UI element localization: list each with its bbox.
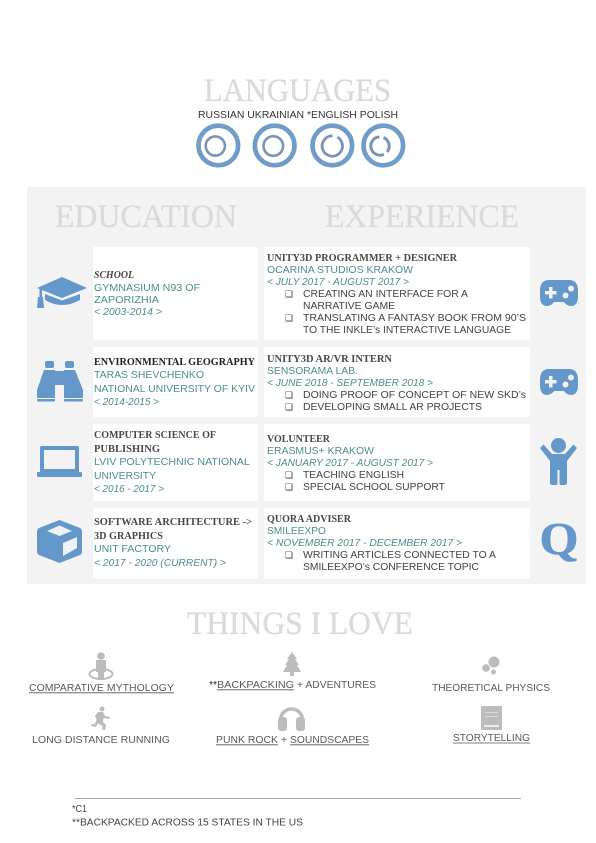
education card: software architecture: 3D GRAPHICS [94, 531, 163, 542]
icon: pine tree [283, 652, 301, 676]
icon: game controller [540, 369, 578, 395]
education card: environmental geography [93, 347, 258, 417]
experience card: unity3d ar/vr intern [264, 347, 530, 417]
interest: punk rock and soundscapes: + [281, 735, 287, 746]
footnotes [72, 798, 521, 828]
experience card: unity3d ar/vr intern: ❏ [285, 391, 293, 401]
experience card: unity3d ar/vr intern: UNITY3D AR/VR INTERN [267, 354, 392, 365]
interest: backpacking and adventures: + ADVENTURES [297, 680, 376, 691]
experience card: unity3d ar/vr intern: SENSORAMA LAB. [267, 366, 358, 377]
experience card: volunteer: VOLUNTEER [267, 434, 330, 445]
experience card: unity3d programmer: < JULY 2017 - AUGUST 2017 > [267, 277, 409, 288]
interest: long distance running: LONG DISTANCE RUNNING [32, 735, 170, 746]
experience card: unity3d programmer [264, 247, 530, 340]
experience card: volunteer: ERASMUS+ KRAKOW [267, 446, 375, 457]
icon: laptop [37, 446, 82, 477]
icon: headphones [278, 709, 305, 731]
icon: cube [37, 520, 82, 563]
heading: experience: EXPERIENCE [325, 199, 519, 235]
experience card: unity3d programmer: TO THE INKLE’s INTERACTIVE LANGUAGE [303, 325, 511, 336]
experience card: volunteer [264, 424, 530, 501]
education card: software architecture: < 2017 - 2020 (CURRENT) > [94, 558, 226, 569]
interest: backpacking and adventures [209, 680, 376, 691]
education card: school: ZAPORIZHIA [94, 295, 159, 306]
experience card: volunteer: SPECIAL SCHOOL SUPPORT [303, 482, 445, 493]
footnotes: **BACKPACKED ACROSS 15 STATES IN THE US [72, 818, 303, 828]
heading: languages: LANGUAGES [204, 73, 391, 109]
ring: english [312, 126, 352, 165]
interest: backpacking and adventures: ** [209, 680, 217, 691]
experience card: volunteer: TEACHING ENGLISH [303, 470, 404, 481]
experience card: unity3d programmer: ❏ [285, 290, 293, 300]
icon: book [481, 706, 502, 730]
education card: software architecture: UNIT FACTORY [94, 544, 171, 555]
experience card: quora adviser: WRITING ARTICLES CONNECTED TO A [303, 550, 496, 561]
interest: backpacking and adventures: BACKPACKING [217, 680, 294, 691]
icon: quora q: Q [540, 514, 578, 564]
education card: school [93, 247, 258, 340]
education card: environmental geography: < 2014-2015 > [94, 397, 159, 408]
icon: person on ring [90, 652, 112, 680]
education card: environmental geography: NATIONAL UNIVERSITY OF KYIV [94, 384, 255, 395]
education card: school: SCHOOL [94, 270, 134, 281]
education card: software architecture: SOFTWARE ARCHITECTURE -> [94, 517, 252, 528]
education card: computer science of publishing: COMPUTER SCIENCE OF [94, 430, 216, 441]
experience card: quora adviser: SMILEEXPO [267, 526, 326, 537]
experience card: quora adviser [264, 508, 530, 578]
education card: computer science of publishing: < 2016 - 2017 > [94, 484, 164, 495]
experience card: unity3d ar/vr intern: DEVELOPING SMALL AR PROJECTS [303, 402, 482, 413]
interest: storytelling: STORYTELLING [453, 733, 530, 744]
icon: bubbles [482, 656, 500, 674]
experience card: volunteer: < JANUARY 2017 - AUGUST 2017 > [267, 458, 433, 469]
ring: russian [198, 126, 238, 165]
education card: school: GYMNASIUM N93 OF [94, 283, 200, 294]
experience card: unity3d ar/vr intern: ❏ [285, 403, 293, 413]
experience card: unity3d programmer: UNITY3D PROGRAMMER + DESIGNER [267, 253, 457, 264]
experience card: volunteer: ❏ [285, 483, 293, 493]
education card: school: < 2003-2014 > [94, 307, 162, 318]
experience card: unity3d programmer: TRANSLATING A FANTASY BOOK FROM 90’S [303, 313, 526, 324]
education card: computer science of publishing: PUBLISHING [94, 444, 160, 455]
interest: punk rock and soundscapes [216, 735, 369, 746]
icon: graduation cap [37, 277, 87, 308]
education card: computer science of publishing: LVIV POLYTECHNIC NATIONAL [94, 457, 250, 468]
education card: environmental geography: TARAS SHEVCHENKO [94, 370, 204, 381]
experience card: unity3d programmer: NARRATIVE GAME [303, 301, 395, 312]
interest: punk rock and soundscapes: SOUNDSCAPES [290, 735, 369, 746]
experience card: unity3d ar/vr intern: DOING PROOF OF CONCEPT OF NEW SKD’s [303, 390, 526, 401]
icon: runner [91, 706, 110, 730]
footnotes: *C1 [72, 804, 87, 815]
experience card: unity3d programmer: CREATING AN INTERFACE FOR A [303, 289, 468, 300]
heading: education: EDUCATION [55, 199, 237, 235]
experience card: quora adviser: SMILEEXPO’s CONFERENCE TOPIC [303, 562, 479, 573]
icon: person with raised arms [540, 438, 577, 485]
interest: theoretical physics: THEORETICAL PHYSICS [432, 683, 550, 694]
ring: polish [364, 126, 403, 165]
panel: education and experience [27, 187, 586, 584]
interest: comparative mythology: COMPARATIVE MYTHOLOGY [29, 683, 174, 694]
experience card: volunteer: ❏ [285, 471, 293, 481]
language names: RUSSIAN UKRAINIAN *ENGLISH POLISH [198, 110, 398, 121]
education card: environmental geography: ENVIRONMENTAL GEOGRAPHY [94, 357, 255, 368]
ring: ukrainian [255, 126, 294, 165]
experience card: quora adviser: QUORA ADVISER [267, 514, 351, 525]
education card: computer science of publishing [93, 424, 258, 501]
education card: computer science of publishing: UNIVERSITY [94, 471, 156, 482]
icon: game controller [540, 280, 578, 306]
experience card: unity3d programmer: ❏ [285, 314, 293, 324]
language proficiency rings [198, 126, 403, 165]
experience card: unity3d ar/vr intern: < JUNE 2018 - SEPTEMBER 2018 > [267, 378, 433, 389]
experience card: unity3d programmer: OCARINA STUDIOS KRAKOW [267, 265, 414, 276]
interest: punk rock and soundscapes: PUNK ROCK [216, 735, 278, 746]
experience card: quora adviser: ❏ [285, 551, 293, 561]
icon: binoculars [37, 361, 83, 402]
education card: software architecture [93, 508, 258, 578]
heading: things i love: THINGS I LOVE [187, 606, 413, 642]
experience card: quora adviser: < NOVEMBER 2017 - DECEMBER 2017 > [267, 538, 462, 549]
